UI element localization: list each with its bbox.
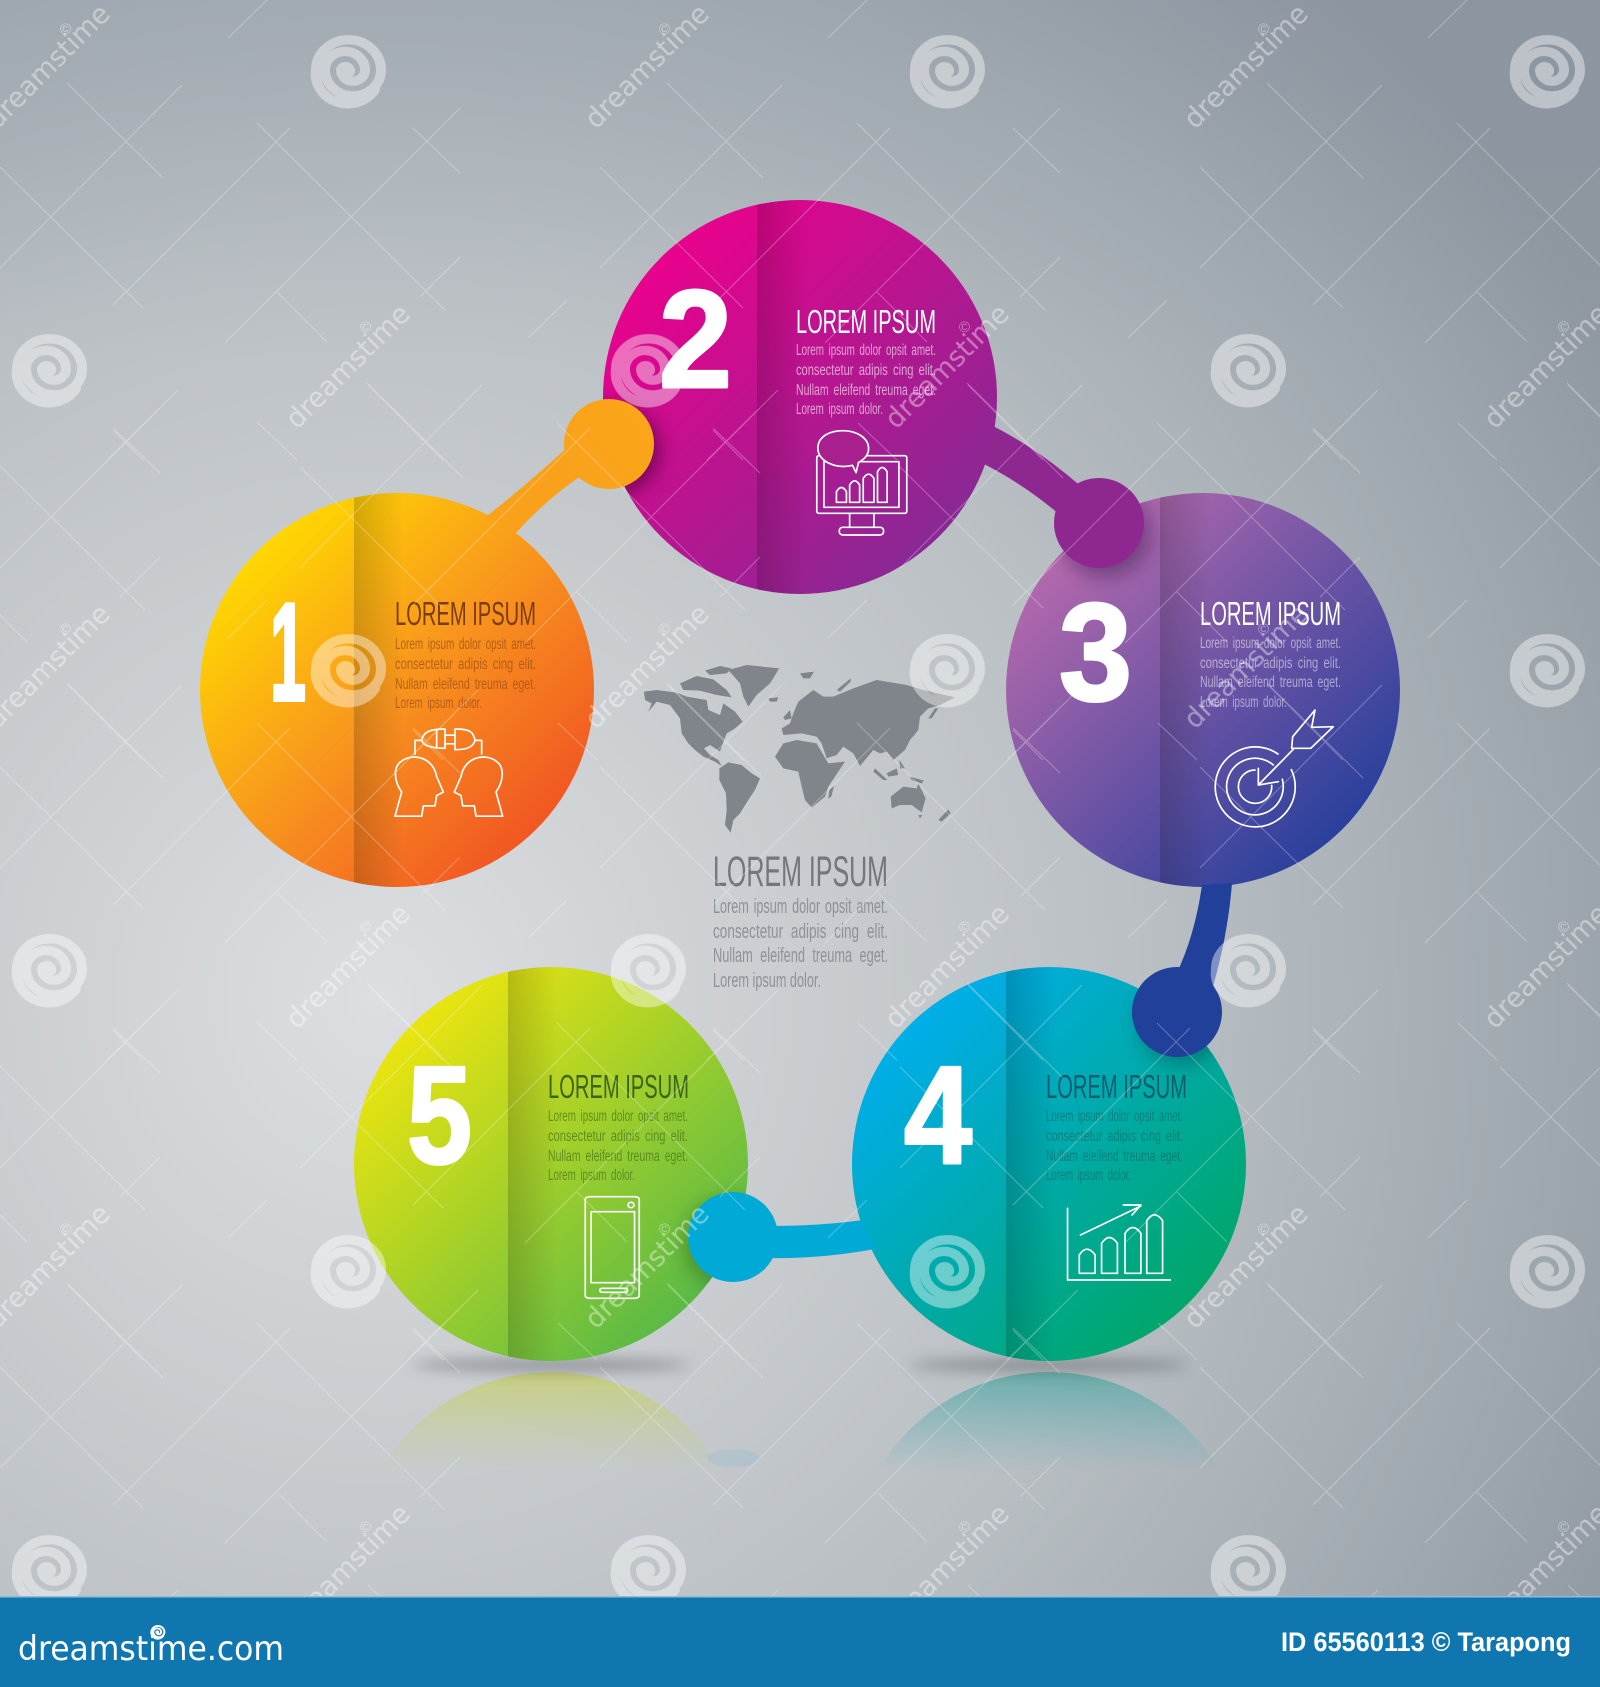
step 1 text: Lorem ipsum dolor opsit amet. xyxy=(395,636,536,653)
step 3 text: Nullam eleifend treuma eget. xyxy=(1200,674,1341,691)
connector: step 3 to step 4 xyxy=(1132,883,1232,1057)
watermark text: dreamstime xyxy=(578,1197,716,1335)
step 5 text: LOREM IPSUM xyxy=(548,1068,689,1105)
step 5 text xyxy=(548,1068,689,1184)
center text block: Lorem ipsum dolor opsit amet. xyxy=(713,896,888,918)
step 3 text xyxy=(1200,595,1341,711)
icon: smartphone xyxy=(585,1197,639,1298)
step 1 text: consectetur adipis cing elit. xyxy=(395,656,536,673)
icon: target and arrow xyxy=(1215,710,1333,827)
step 3 number: 3 xyxy=(1059,575,1132,730)
step 1 text xyxy=(395,595,536,712)
center text block: consectetur adipis cing elit. xyxy=(713,921,888,943)
connector: step 4 to step 5 xyxy=(688,1192,875,1282)
step 4 text: Lorem ipsum dolor opsit amet. xyxy=(1046,1108,1183,1125)
icon: monitor with chart and speech bubble xyxy=(817,431,907,535)
image id and credit: ID 65560113 © Tarapong xyxy=(1281,1627,1571,1657)
step 3 text: consectetur adipis cing elit. xyxy=(1200,655,1341,672)
knob shadows on neighbouring circles xyxy=(570,405,1227,1288)
center text block: LOREM IPSUM xyxy=(713,848,888,896)
step 3 text: Lorem ipsum dolor. xyxy=(1200,694,1287,711)
connector: step 1 to step 2 xyxy=(487,399,654,533)
watermark text: dreamstime xyxy=(1177,1197,1315,1335)
step 1 panel: 1 xyxy=(270,575,306,730)
step 5 text: Lorem ipsum dolor opsit amet. xyxy=(548,1108,688,1125)
watermark text: dreamstime xyxy=(1177,597,1315,735)
center text block: Nullam eleifend treuma eget. xyxy=(713,945,888,967)
watermark text: © xyxy=(1558,319,1569,336)
step 5 text: consectetur adipis cing elit. xyxy=(548,1128,688,1145)
watermark text: dreamstime xyxy=(279,1497,417,1635)
step 4 number: 4 xyxy=(904,1038,972,1193)
watermark text: © xyxy=(60,1221,71,1238)
icon: rising bar chart xyxy=(1068,1205,1170,1280)
watermark text: © xyxy=(1558,919,1569,936)
watermark text: © xyxy=(360,319,371,336)
step 2 panel xyxy=(603,197,997,597)
watermark text: dreamstime xyxy=(878,1497,1016,1635)
watermark text: © xyxy=(959,919,970,936)
footer logo: dreamstime.com xyxy=(18,1629,284,1669)
step 2 text xyxy=(796,303,936,418)
watermark text: © xyxy=(959,1519,970,1536)
step 3 panel xyxy=(1006,490,1400,890)
step 1 text: Nullam eleifend treuma eget. xyxy=(395,676,536,693)
watermark text: © xyxy=(1558,1519,1569,1536)
step 2 text: Lorem ipsum dolor opsit amet. xyxy=(796,342,936,359)
watermark text: dreamstime xyxy=(578,597,716,735)
watermark text: © xyxy=(1258,21,1269,38)
step 4 text: Lorem ipsum dolor. xyxy=(1046,1167,1131,1184)
center text block: Lorem ipsum dolor. xyxy=(713,970,821,992)
watermark text: dreamstime xyxy=(279,297,417,435)
watermark text: dreamstime xyxy=(878,297,1016,435)
center text block xyxy=(713,848,888,992)
connector: step 2 to step 3 xyxy=(984,426,1144,568)
watermark text: © xyxy=(60,21,71,38)
step 2 text: LOREM IPSUM xyxy=(796,303,936,340)
watermark text: © xyxy=(659,21,670,38)
watermark text: © xyxy=(360,1519,371,1536)
step 1 text: Lorem ipsum dolor. xyxy=(395,695,482,712)
watermark text: dreamstime xyxy=(279,897,417,1035)
step 4 text: consectetur adipis cing elit. xyxy=(1046,1128,1183,1145)
icon: two heads with plug xyxy=(395,729,503,816)
step 1 panel xyxy=(200,490,594,890)
footer banner xyxy=(0,1596,1600,1687)
step 4 text: LOREM IPSUM xyxy=(1046,1068,1187,1105)
reflections and floor shadows xyxy=(389,1352,1212,1467)
step 4 panel xyxy=(852,967,1246,1367)
step 5 text: Nullam eleifend treuma eget. xyxy=(548,1148,688,1165)
step 5 text: Lorem ipsum dolor. xyxy=(548,1167,635,1184)
watermark text: © xyxy=(659,621,670,638)
watermark text: © xyxy=(60,621,71,638)
step 3 text: Lorem ipsum dolor opsit amet. xyxy=(1200,635,1341,652)
watermark text: © xyxy=(1258,621,1269,638)
watermark text: © xyxy=(360,919,371,936)
step 4 text: Nullam eleifend treuma eget. xyxy=(1046,1148,1183,1165)
step 2 text: Nullam eleifend treuma eget. xyxy=(796,382,936,399)
step 2 text: consectetur adipis cing elit. xyxy=(796,362,936,379)
step 2 text: Lorem ipsum dolor. xyxy=(796,401,883,418)
watermark text: © xyxy=(959,319,970,336)
watermark text: © xyxy=(659,1221,670,1238)
watermark text: © xyxy=(1258,1221,1269,1238)
step 5 number: 5 xyxy=(407,1038,472,1193)
world map xyxy=(644,665,955,833)
watermark text: dreamstime xyxy=(878,897,1016,1035)
step 3 text: LOREM IPSUM xyxy=(1200,595,1341,632)
step 4 text xyxy=(1046,1068,1187,1184)
step 1 text: LOREM IPSUM xyxy=(395,595,536,632)
step 5 panel xyxy=(354,967,748,1367)
step 2 number: 2 xyxy=(659,262,732,417)
